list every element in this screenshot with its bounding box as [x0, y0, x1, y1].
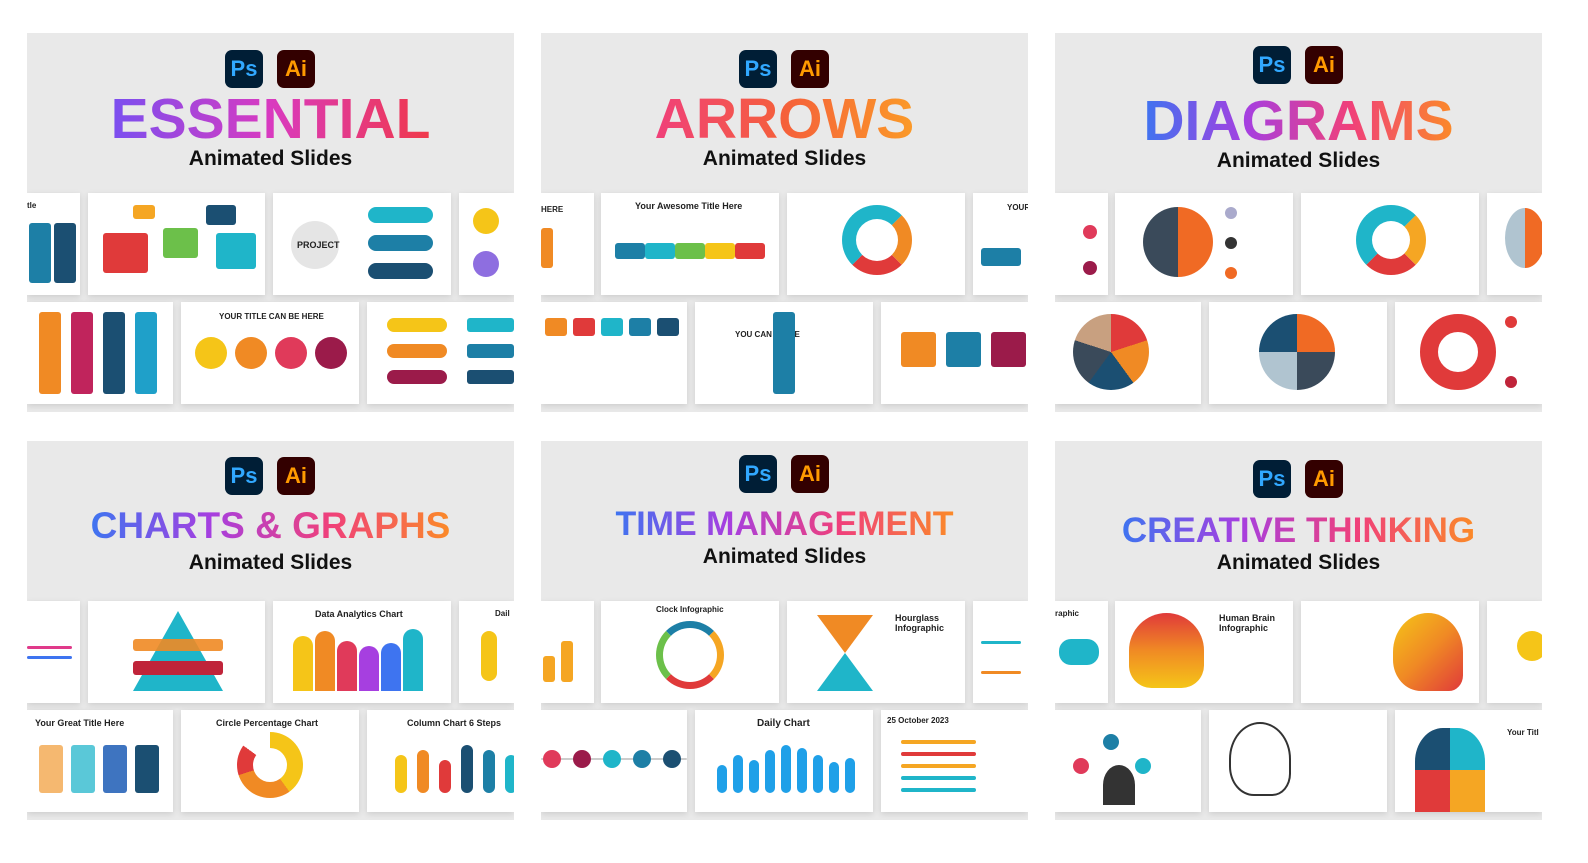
icon: Ai [277, 457, 315, 495]
slide card 6 [1209, 710, 1387, 812]
icon: Ai: Ai [799, 56, 821, 81]
icon: Ps: Ps [745, 461, 771, 486]
subtitle: Animated Slides [1217, 149, 1380, 172]
title: ARROWS [655, 87, 914, 151]
icon: Ps [225, 50, 263, 88]
slide card 4 [973, 601, 1028, 703]
slide card 4 [459, 601, 514, 703]
slide card 5 [541, 302, 687, 404]
slide card 1 [541, 601, 594, 703]
slide card 2 [601, 193, 779, 295]
slide card 7: 25 October 2023 [887, 716, 949, 725]
icon: Ps: Ps [745, 56, 771, 81]
panel: diagrams [1055, 33, 1542, 412]
slide card 5 [27, 710, 173, 812]
slide card 2: Clock Infographic [656, 605, 724, 614]
title: TIME MANAGEMENT [615, 505, 954, 543]
slide card 6 [1209, 302, 1387, 404]
slide card 3: Infographic [895, 623, 944, 633]
slide card 2 [601, 601, 779, 703]
slide card 7 [881, 302, 1028, 404]
slide card 7 [881, 710, 1028, 812]
slide card 1 [1055, 193, 1108, 295]
subtitle: Animated Slides [703, 147, 866, 170]
icon: Ps: Ps [231, 463, 257, 488]
icon: Ai [1305, 460, 1343, 498]
slide card 4 [1487, 601, 1542, 703]
slide card 2 [1115, 193, 1293, 295]
slide card 1: tle [27, 201, 36, 210]
slide card 3 [1301, 601, 1479, 703]
icon: Ps [739, 455, 777, 493]
panel: essential [27, 33, 514, 412]
subtitle: Animated Slides [189, 551, 352, 574]
slide card 1 [27, 193, 80, 295]
slide card 3: Hourglass [895, 613, 939, 623]
title: CREATIVE THINKING [1122, 511, 1475, 550]
icon: Ps [225, 457, 263, 495]
slide card 3 [787, 193, 965, 295]
slide card 5 [27, 302, 173, 404]
panel: charts & graphs [27, 441, 514, 820]
slide card 3 [273, 601, 451, 703]
icon: Ps [739, 50, 777, 88]
slide card 6: YOU CAN WRITE [735, 330, 800, 339]
slide card 2 [1115, 601, 1293, 703]
slide card 2: Infographic [1219, 623, 1268, 633]
slide card 4 [1487, 193, 1542, 295]
slide card 3: PROJECT [297, 240, 340, 250]
slide card 6: YOUR TITLE CAN BE HERE [219, 312, 324, 321]
icon: Ai [791, 455, 829, 493]
icon: Ai [1305, 46, 1343, 84]
icon: Ps [1253, 460, 1291, 498]
subtitle: Animated Slides [1217, 551, 1380, 574]
slide card 6: Circle Percentage Chart [216, 718, 318, 728]
icon: Ai: Ai [1313, 52, 1335, 77]
slide card 4 [459, 193, 514, 295]
slide card 3 [1301, 193, 1479, 295]
slide card 3 [273, 193, 451, 295]
slide card 2 [88, 193, 265, 295]
subtitle: Animated Slides [189, 147, 352, 170]
slide card 5 [1055, 302, 1201, 404]
icon: Ps: Ps [1259, 52, 1285, 77]
slide card 3: Data Analytics Chart [315, 609, 403, 619]
icon: Ai: Ai [799, 461, 821, 486]
panel: arrows [541, 33, 1028, 412]
icon: Ai: Ai [285, 463, 307, 488]
slide card 5 [541, 710, 687, 812]
slide card 2: Human Brain [1219, 613, 1275, 623]
panel: time management [541, 441, 1028, 820]
slide card 1 [541, 193, 594, 295]
slide card 1: HERE [541, 205, 563, 214]
icon: Ai [791, 50, 829, 88]
slide card 7 [1395, 710, 1542, 812]
icon: Ai: Ai [1313, 466, 1335, 491]
icon: Ps: Ps [231, 56, 257, 81]
icon: Ps: Ps [1259, 466, 1285, 491]
slide card 4: Dail [495, 609, 510, 618]
title: CHARTS & GRAPHS [91, 505, 450, 546]
slide card 1: raphic [1055, 609, 1079, 618]
slide card 1 [27, 601, 80, 703]
slide card 3 [787, 601, 965, 703]
icon: Ps [1253, 46, 1291, 84]
icon: Ai [277, 50, 315, 88]
slide card 7: Column Chart 6 Steps [407, 718, 501, 728]
slide card 7 [367, 710, 514, 812]
subtitle: Animated Slides [703, 545, 866, 568]
slide card 1 [1055, 601, 1108, 703]
slide card 6 [695, 302, 873, 404]
slide card 6: Daily Chart [757, 718, 810, 729]
title: ESSENTIAL [111, 87, 430, 151]
slide card 5 [1055, 710, 1201, 812]
slide card 6 [695, 710, 873, 812]
slide card 7 [1395, 302, 1542, 404]
panel: creative thinking [1055, 441, 1542, 820]
slide card 2: Your Awesome Title Here [635, 201, 742, 211]
slide card 6 [181, 302, 359, 404]
slide card 6 [181, 710, 359, 812]
slide card 4 [973, 193, 1028, 295]
icon: Ai: Ai [285, 56, 307, 81]
slide card 7 [367, 302, 514, 404]
slide card 2 [88, 601, 265, 703]
slide card 7: Your Titl [1507, 728, 1539, 737]
title: DIAGRAMS [1143, 89, 1454, 153]
slide card 5: Your Great Title Here [35, 718, 124, 728]
